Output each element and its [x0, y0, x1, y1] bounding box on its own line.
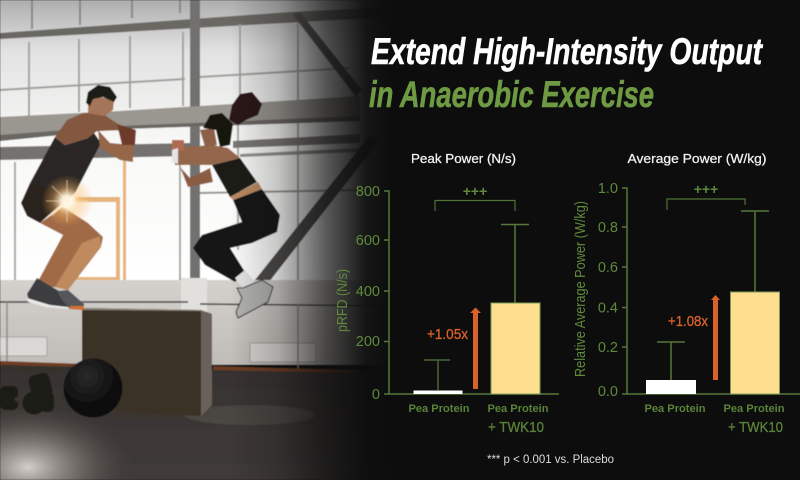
- chart: average power: [573, 152, 800, 436]
- significance marker: +++: [694, 181, 718, 197]
- axes: [622, 188, 800, 394]
- y axis tick labels: [356, 184, 380, 403]
- bar: pea protein: [414, 390, 462, 394]
- male athlete: [21, 85, 136, 310]
- y axis tick labels: 0.6: [598, 260, 618, 276]
- x axis label: combo: [488, 403, 549, 436]
- bar: pea protein + TWK10: [491, 303, 540, 394]
- error bar: pea protein: [424, 360, 450, 390]
- chart heading: Average Power (W/kg): [628, 152, 766, 166]
- significance marker: +++: [463, 183, 487, 199]
- x axis label: combo: + TWK10: [728, 420, 783, 436]
- y axis tick labels: 400: [356, 284, 380, 300]
- chart heading: Peak Power (N/s): [411, 152, 516, 166]
- dumbbells: [0, 372, 54, 414]
- axes: [384, 191, 559, 394]
- photo fade into dark background: [230, 0, 390, 480]
- significance bracket: [435, 200, 515, 211]
- x axis label: combo: + TWK10: [488, 420, 544, 436]
- y axis tick labels: 0.0: [598, 384, 618, 400]
- photo: athletes jumping onto box in gym: [0, 0, 390, 480]
- x axis label: combo: Pea Protein: [488, 403, 549, 415]
- y axis tick labels: 200: [356, 334, 380, 350]
- y axis tick labels: 0: [372, 387, 380, 403]
- x axis label: combo: Pea Protein: [724, 403, 785, 415]
- y axis tick labels: [598, 181, 618, 400]
- chart: peak power: [334, 152, 559, 436]
- bar: pea protein: [646, 380, 696, 394]
- error bar: pea protein + TWK10: [501, 224, 529, 303]
- y axis tick labels: 800: [356, 184, 380, 200]
- arrow: increase: [711, 295, 720, 380]
- x axis label: pea protein: Pea Protein: [408, 403, 470, 415]
- gym windows and steel frame: [0, 0, 370, 281]
- y axis tick labels: 1.0: [598, 181, 618, 197]
- footnote: *** p < 0.001 vs. Placebo: [487, 454, 614, 466]
- arrow: increase: [470, 308, 481, 389]
- plyo box: [82, 308, 212, 416]
- x axis label: pea protein: Pea Protein: [644, 403, 706, 415]
- increase label: +1.08x: [668, 314, 709, 330]
- significance bracket: [667, 199, 745, 210]
- sunlit window frame: [74, 160, 126, 281]
- increase label: +1.05x: [427, 327, 469, 343]
- medicine ball: [64, 358, 122, 418]
- title: [369, 31, 763, 115]
- error bar: pea protein: [657, 342, 685, 380]
- title line 2: in Anaerobic Exercise: [369, 74, 654, 115]
- y axis tick labels: 0.4: [598, 300, 618, 316]
- female athlete: [172, 92, 280, 318]
- y axis tick labels: 600: [356, 233, 380, 249]
- x axis label: combo: [724, 403, 785, 436]
- bar: pea protein + TWK10: [730, 292, 780, 394]
- y axis tick labels: 0.2: [598, 340, 618, 356]
- wall, floor and radiators: [0, 278, 390, 480]
- error bar: pea protein + TWK10: [741, 211, 769, 292]
- y axis label: Relative Average Power (W/kg): [573, 201, 589, 377]
- sun glare: [42, 176, 92, 224]
- y axis tick labels: 0.8: [598, 220, 618, 236]
- y axis label: pRFD (N/s): [334, 269, 351, 332]
